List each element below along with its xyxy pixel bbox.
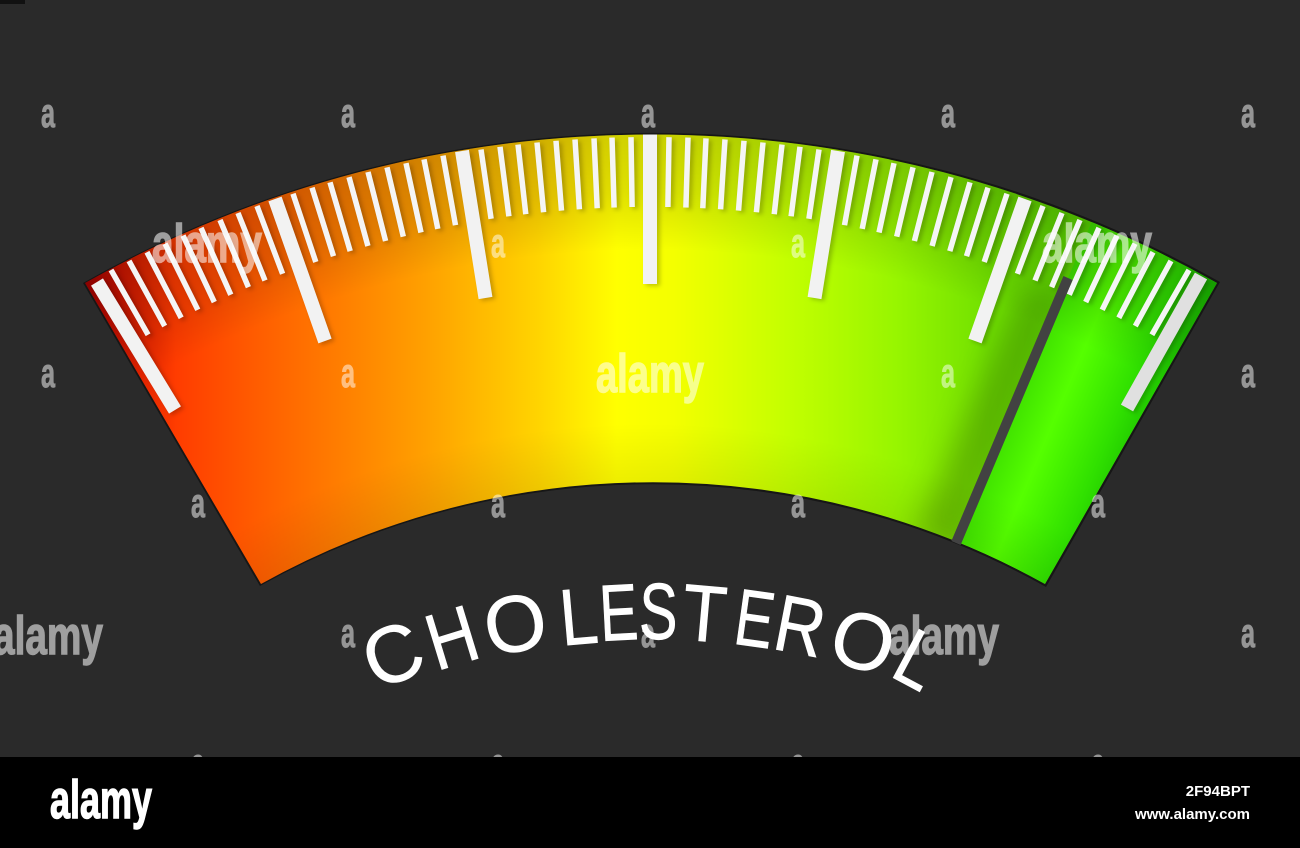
watermark: small marks: a xyxy=(341,610,356,656)
gauge edge shadow xyxy=(83,133,1220,587)
end tick right xyxy=(1127,276,1201,408)
major ticks xyxy=(97,134,1025,410)
watermark: small marks: a xyxy=(191,480,206,526)
watermark: small marks: a xyxy=(1241,90,1256,136)
watermark: large marks: alamy xyxy=(596,344,704,404)
title: CHOLESTEROL xyxy=(349,566,956,708)
watermark: large marks: alamy xyxy=(1042,214,1152,274)
watermark: small marks: a xyxy=(491,220,506,266)
watermark: small marks: a xyxy=(341,350,356,396)
arc shading xyxy=(85,135,1217,584)
site url: www.alamy.com xyxy=(1134,806,1250,823)
title: CHOLESTEROL: E xyxy=(597,567,640,658)
watermark: small marks: a xyxy=(41,90,56,136)
bar logo: alamy xyxy=(50,770,152,830)
watermark: small marks: a xyxy=(191,740,206,786)
watermark: large marks: alamy xyxy=(152,214,262,274)
watermark: small marks: a xyxy=(941,350,956,396)
minor ticks xyxy=(111,137,1189,335)
title: CHOLESTEROL: R xyxy=(768,577,833,675)
watermark: small marks: a xyxy=(41,350,56,396)
watermark: small marks: a xyxy=(641,610,656,656)
watermark: small marks: a xyxy=(1091,740,1106,786)
watermark: small marks: a xyxy=(791,740,806,786)
title: CHOLESTEROL: T xyxy=(679,568,730,661)
image id: 2F94BPT xyxy=(1186,783,1250,800)
title: CHOLESTEROL: O xyxy=(477,575,554,673)
title: CHOLESTEROL: C xyxy=(349,602,436,707)
needle shadow xyxy=(915,290,1070,550)
gauge xyxy=(83,133,1220,587)
watermark: small marks: a xyxy=(791,220,806,266)
title: CHOLESTEROL: O xyxy=(820,590,906,693)
watermark: small marks: a xyxy=(1241,350,1256,396)
title: CHOLESTEROL: S xyxy=(638,566,678,657)
title: CHOLESTEROL: L xyxy=(556,570,601,663)
watermark: small marks: a xyxy=(941,90,956,136)
gauge colour band xyxy=(85,135,1217,584)
title: CHOLESTEROL: L xyxy=(880,611,956,708)
needle xyxy=(956,278,1068,543)
watermark: large marks: alamy xyxy=(889,606,999,666)
watermark: small marks: a xyxy=(1091,480,1106,526)
scale ticks xyxy=(97,134,1201,410)
watermark: small marks: a xyxy=(791,480,806,526)
watermark: small marks: a xyxy=(341,90,356,136)
watermark: large marks xyxy=(0,214,1152,666)
title: CHOLESTEROL: E xyxy=(730,572,780,666)
watermark: small marks: a xyxy=(491,480,506,526)
watermark: small marks: a xyxy=(491,740,506,786)
title: CHOLESTEROL: H xyxy=(415,588,489,688)
watermark: small marks xyxy=(41,90,1256,786)
right section beyond needle xyxy=(955,200,1217,584)
watermark: small marks: a xyxy=(641,90,656,136)
bottom bar xyxy=(0,757,1300,848)
watermark: small marks: a xyxy=(1241,610,1256,656)
